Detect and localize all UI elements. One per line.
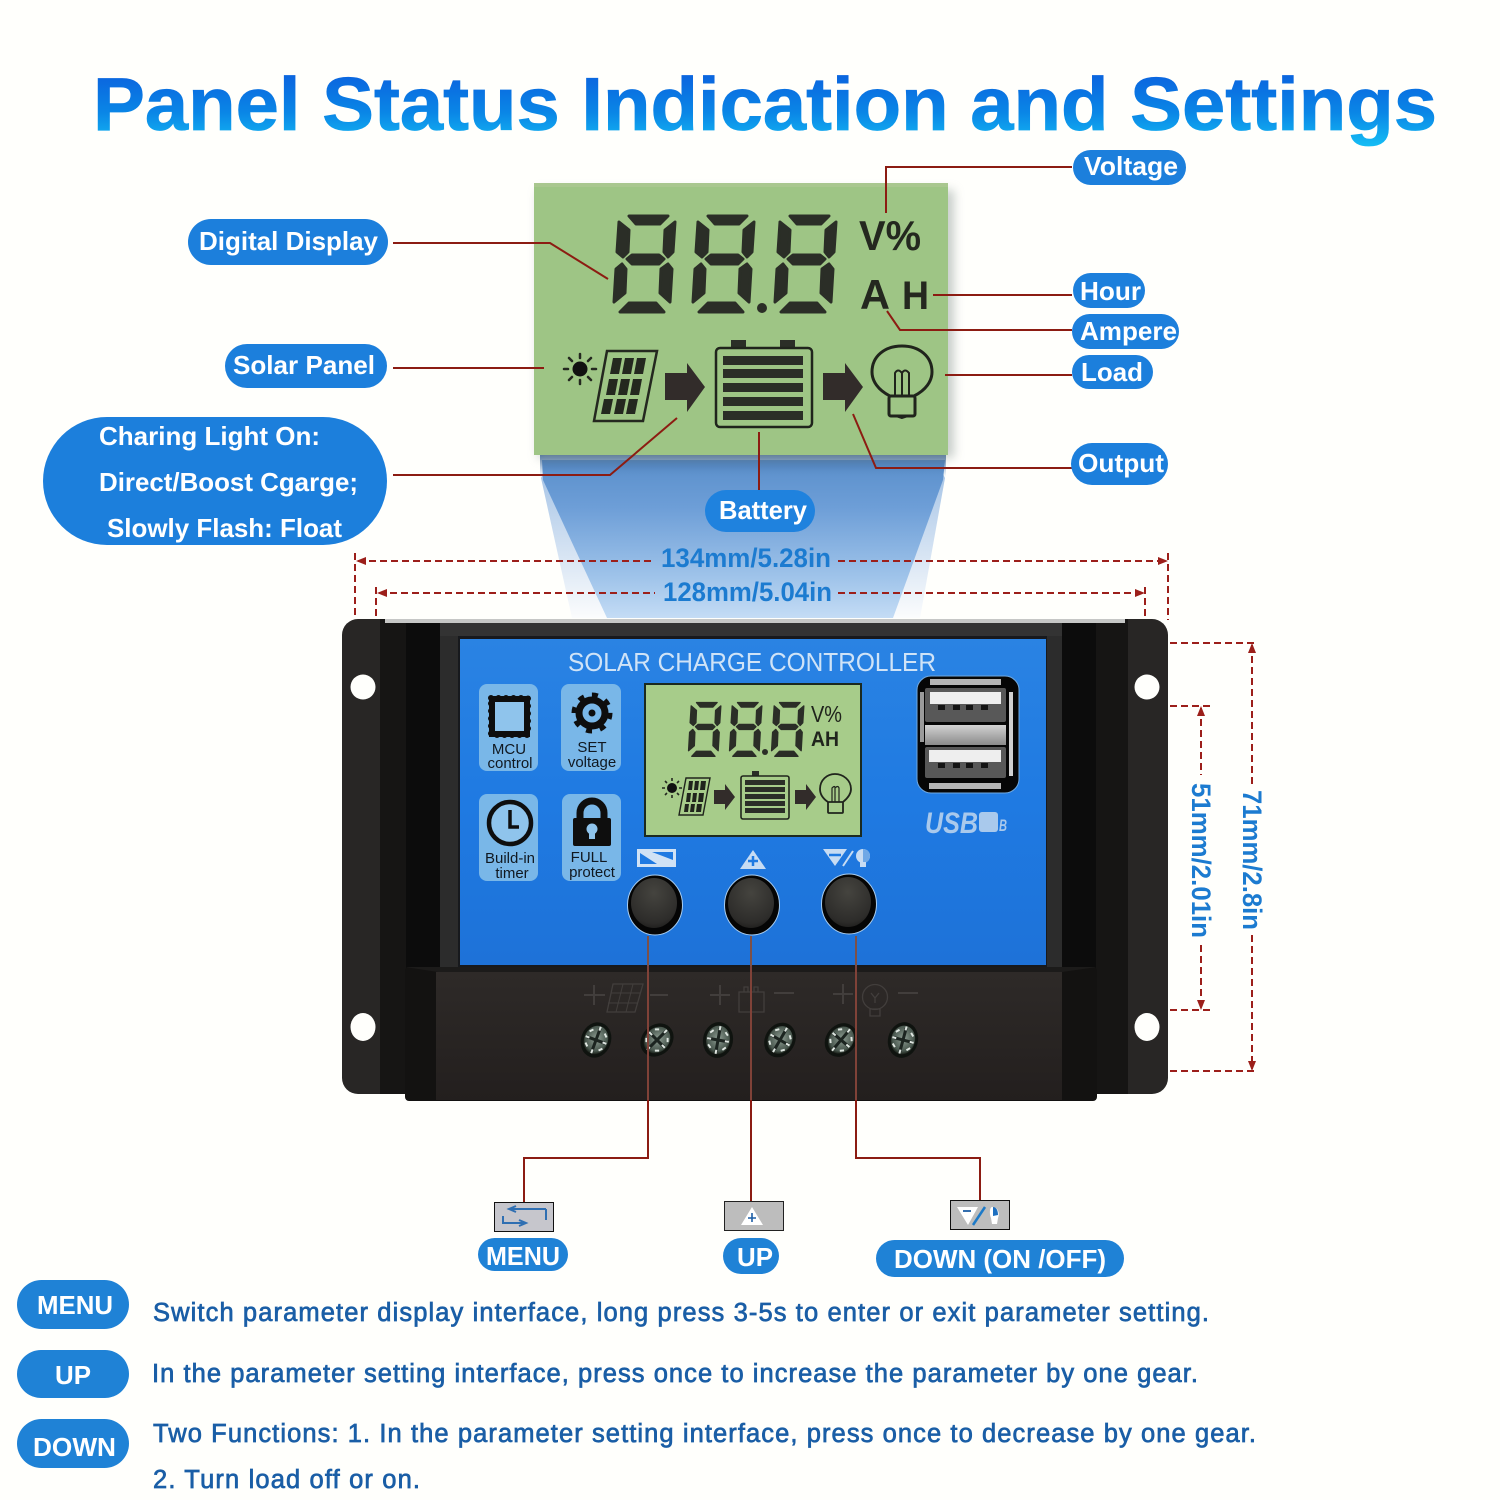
terminal screws [576,1017,922,1063]
USB port [917,676,1019,793]
height dimension: 71mm: 71mm/2.8in [1237,790,1267,930]
width dimension: 134mm [355,543,1168,620]
height dimension: 71mm [1170,643,1267,1071]
icon: arrow solar to battery [665,363,705,412]
device LCD unit labels: AH [811,728,839,751]
callout: Output [1071,443,1168,485]
blue faceplate [460,639,1046,965]
device LCD icons [662,771,851,819]
button icon: up [740,850,766,869]
embossed terminal markings [584,984,918,1016]
callout: Battery: Battery [719,495,808,525]
feature tile: Build-in timer [479,794,538,882]
key icon: down and bulb [950,1200,1010,1230]
feature tile: Build-in timer: Build-in [485,850,535,867]
LCD unit labels: V% [859,212,921,259]
callout: charging light states: Charing Light On: [99,421,320,451]
icon: solar panel [594,351,657,421]
callout: Battery [705,490,815,532]
width dimension: 128mm: 128mm/5.04in [663,577,832,607]
callout: Load [1072,355,1153,389]
feature tile: FULL protect: FULL [571,849,607,866]
label: DOWN (ON /OFF) [876,1240,1124,1277]
width dimension: 128mm [376,577,1145,618]
legend row: DOWN: Two Functions: 1. In the parameter setting interface, press once to decrease by one gear. [153,1420,1256,1448]
label: UP [723,1238,779,1274]
callout: Solar Panel [225,344,387,388]
feature tile: FULL protect: protect [569,864,616,881]
callout: Output: Output [1078,448,1164,478]
callout: Load: Load [1081,357,1143,387]
LCD unit labels: A [860,271,890,318]
callout: charging light states: Direct/Boost Cgarge; [99,467,358,497]
height dimension: 51mm: 51mm/2.01in [1186,783,1216,938]
legend row: UP: In the parameter setting interface, press once to increase the parameter by one gear. [152,1360,1198,1388]
legend row: UP: UP [55,1360,91,1390]
legend row: MENU: MENU [37,1290,113,1320]
feature tile: SET voltage [561,684,621,771]
device LCD unit labels [811,701,842,751]
button icon: down and bulb [823,849,870,867]
device LCD screen [644,683,862,837]
feature tile: FULL protect [562,794,621,881]
callout: Voltage [1073,150,1186,185]
key icon: up [724,1202,784,1230]
height dimension: 51mm [1170,706,1216,1010]
button icon: menu [637,849,676,867]
button: up [724,875,780,935]
feature tile: SET voltage: SET [577,739,607,756]
LCD unit labels [859,212,929,318]
USB logo: B [999,816,1007,835]
legend row: MENU [17,1280,1209,1329]
label: DOWN (ON /OFF): DOWN (ON /OFF) [894,1244,1106,1274]
feature tile: MCU control [479,684,538,772]
label: MENU: MENU [486,1241,560,1271]
button: down [822,874,876,934]
LCD unit labels: H [902,274,929,318]
device LCD digits [689,703,804,756]
legend row: DOWN: DOWN [33,1432,116,1462]
callout: Ampere: Ampere [1080,316,1177,346]
legend row: DOWN: 2. Turn load off or on. [153,1466,420,1494]
callout: charging light states [43,417,387,545]
feature tile: Build-in timer: timer [495,865,529,882]
terminal block [405,967,1097,1101]
light beam from display down to controller [540,453,946,618]
callout: charging light states: Slowly Flash: Float [107,513,342,543]
title: Panel Status Indication and Settings [93,62,1437,146]
icon: sun [564,354,596,384]
callout: Digital Display: Digital Display [199,226,379,256]
legend row: DOWN [17,1419,1256,1494]
icon: light bulb [872,346,932,418]
callout: Hour: Hour [1080,276,1141,306]
leader lines for LCD callouts [393,167,1072,491]
panel: enlarged LCD display [534,183,954,458]
label: UP: UP [737,1242,773,1272]
legend row: MENU: Switch parameter display interface, long press 3-5s to enter or exit parameter setting. [153,1299,1209,1327]
solar charge controller device [342,619,1168,1101]
key icon: menu [494,1202,554,1232]
feature tile: MCU control: MCU [492,741,526,758]
icon: arrow battery to load [823,363,863,412]
USB logo: USB [925,807,978,840]
legend row: UP [17,1350,1198,1398]
device LCD unit labels: V% [811,701,842,727]
callout: Solar Panel: Solar Panel [233,350,375,380]
LCD digits 88.8 [614,216,836,313]
callout: Digital Display [188,219,388,265]
feature tile: MCU control: control [487,755,533,772]
width dimension: 134mm: 134mm/5.28in [661,543,831,573]
button: menu [628,875,682,935]
icon: battery [716,340,812,427]
leader lines from buttons to key icons [524,936,980,1202]
faceplate heading: SOLAR CHARGE CONTROLLER [568,647,936,677]
callout: Voltage: Voltage [1084,151,1178,181]
controller housing [342,619,1168,1094]
feature tile: SET voltage: voltage [568,754,616,771]
